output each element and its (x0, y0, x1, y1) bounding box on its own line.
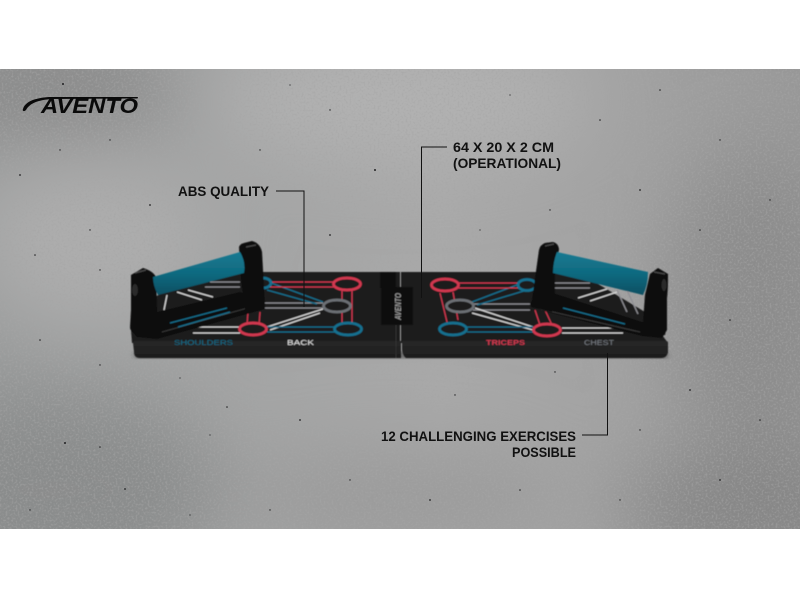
label: chest: CHEST (584, 338, 614, 347)
callout: dimensions: 64 X 20 X 2 CM (453, 139, 554, 155)
right exercise colour lines (440, 283, 638, 333)
callout: ABS quality: ABS QUALITY (178, 183, 270, 199)
push-up board (130, 241, 668, 358)
label: shoulders: SHOULDERS (174, 338, 233, 347)
callout: ABS quality (178, 183, 304, 307)
callout: dimensions (422, 139, 561, 298)
callout: exercises: POSSIBLE (512, 444, 576, 460)
right push-up handle (530, 242, 668, 338)
label: triceps: TRICEPS (486, 338, 525, 347)
right exercise holes (432, 279, 560, 336)
left exercise holes (240, 278, 362, 335)
teal grip (153, 252, 244, 295)
callout: exercises (381, 353, 608, 460)
label: back: BACK (287, 338, 314, 347)
left board panel (131, 272, 401, 358)
teal grip (553, 252, 648, 295)
right board panel (401, 272, 668, 358)
callout: exercises: 12 CHALLENGING EXERCISES (381, 428, 576, 444)
left exercise colour lines (154, 280, 352, 333)
centre strap with logo: AVENTO (394, 292, 403, 321)
left push-up handle (130, 241, 265, 339)
board shadow (135, 352, 668, 358)
centre strap with logo (380, 272, 413, 358)
callout: dimensions: (OPERATIONAL) (453, 155, 561, 171)
logo: Avento: AVENTO (40, 94, 138, 118)
